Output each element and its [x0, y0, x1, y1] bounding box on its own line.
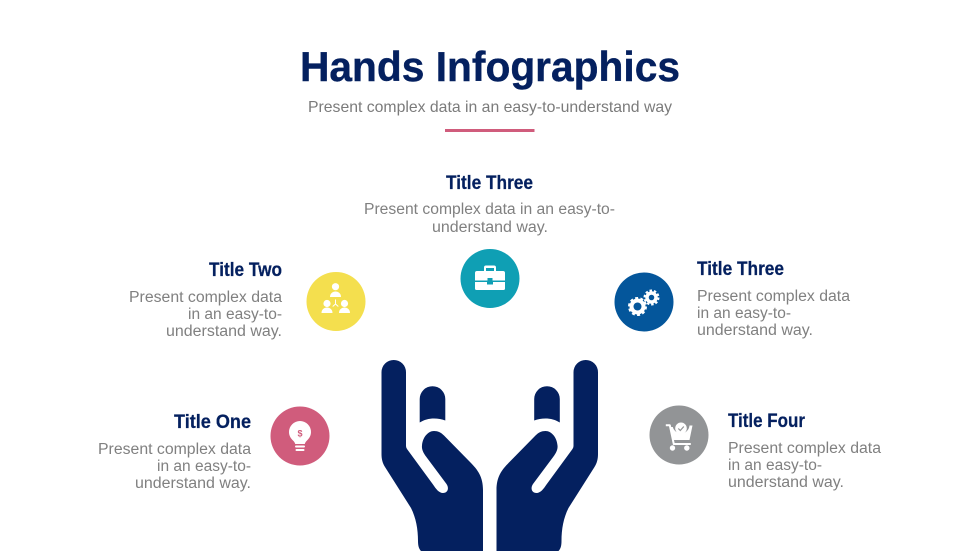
- text block: Title One: [98, 412, 251, 492]
- icon: gears in blue circle: [614, 272, 674, 332]
- text block: Title Three (top): understand way.: [432, 219, 548, 236]
- text block: Title Two: Title Two: [209, 260, 282, 281]
- text block: Title One: Title One: [174, 412, 251, 433]
- text block: Title Three (top): [364, 173, 615, 236]
- right small finger: [534, 386, 560, 422]
- left small finger: [420, 386, 445, 422]
- title: Hands Infographics: [300, 43, 680, 90]
- text block: Title Two: in an easy-to-: [188, 306, 282, 323]
- text block: Title One: in an easy-to-: [157, 458, 251, 475]
- text block: Title Three (top): Title Three: [446, 173, 533, 194]
- illustration: open hands: [382, 360, 598, 551]
- text block: Title Three (right): [697, 259, 850, 339]
- text block: Title Four: in an easy-to-: [728, 457, 822, 474]
- text block: Title Three (right): understand way.: [697, 322, 813, 339]
- text block: Title Four: Present complex data: [728, 440, 881, 457]
- icon: briefcase in teal circle: [460, 249, 520, 308]
- text block: Title Two: [129, 260, 282, 340]
- right hand: [496, 360, 598, 551]
- subtitle: Present complex data in an easy-to-understand way: [308, 99, 672, 116]
- text block: Title Three (right): in an easy-to-: [697, 305, 791, 322]
- text block: Title Two: understand way.: [166, 323, 282, 340]
- text block: Title Four: [728, 411, 881, 491]
- text block: Title One: Present complex data: [98, 441, 251, 458]
- icon: lightbulb with dollar in pink circle: [270, 406, 330, 466]
- text block: Title Three (right): Title Three: [697, 259, 784, 280]
- text block: Title Four: Title Four: [728, 411, 806, 432]
- text block: Title One: understand way.: [135, 475, 251, 492]
- text block: Title Four: understand way.: [728, 474, 844, 491]
- text block: Title Two: Present complex data: [129, 289, 282, 306]
- icon: lightbulb with dollar in pink circle: $: [297, 428, 303, 438]
- text block: Title Three (right): Present complex data: [697, 288, 850, 305]
- icon: shopping cart with check in gray circle: [650, 406, 708, 464]
- title underline: [445, 129, 534, 132]
- icon: people hierarchy in yellow circle: [306, 272, 366, 331]
- left hand: [382, 360, 483, 551]
- text block: Title Three (top): Present complex data in an easy-to-: [364, 201, 615, 218]
